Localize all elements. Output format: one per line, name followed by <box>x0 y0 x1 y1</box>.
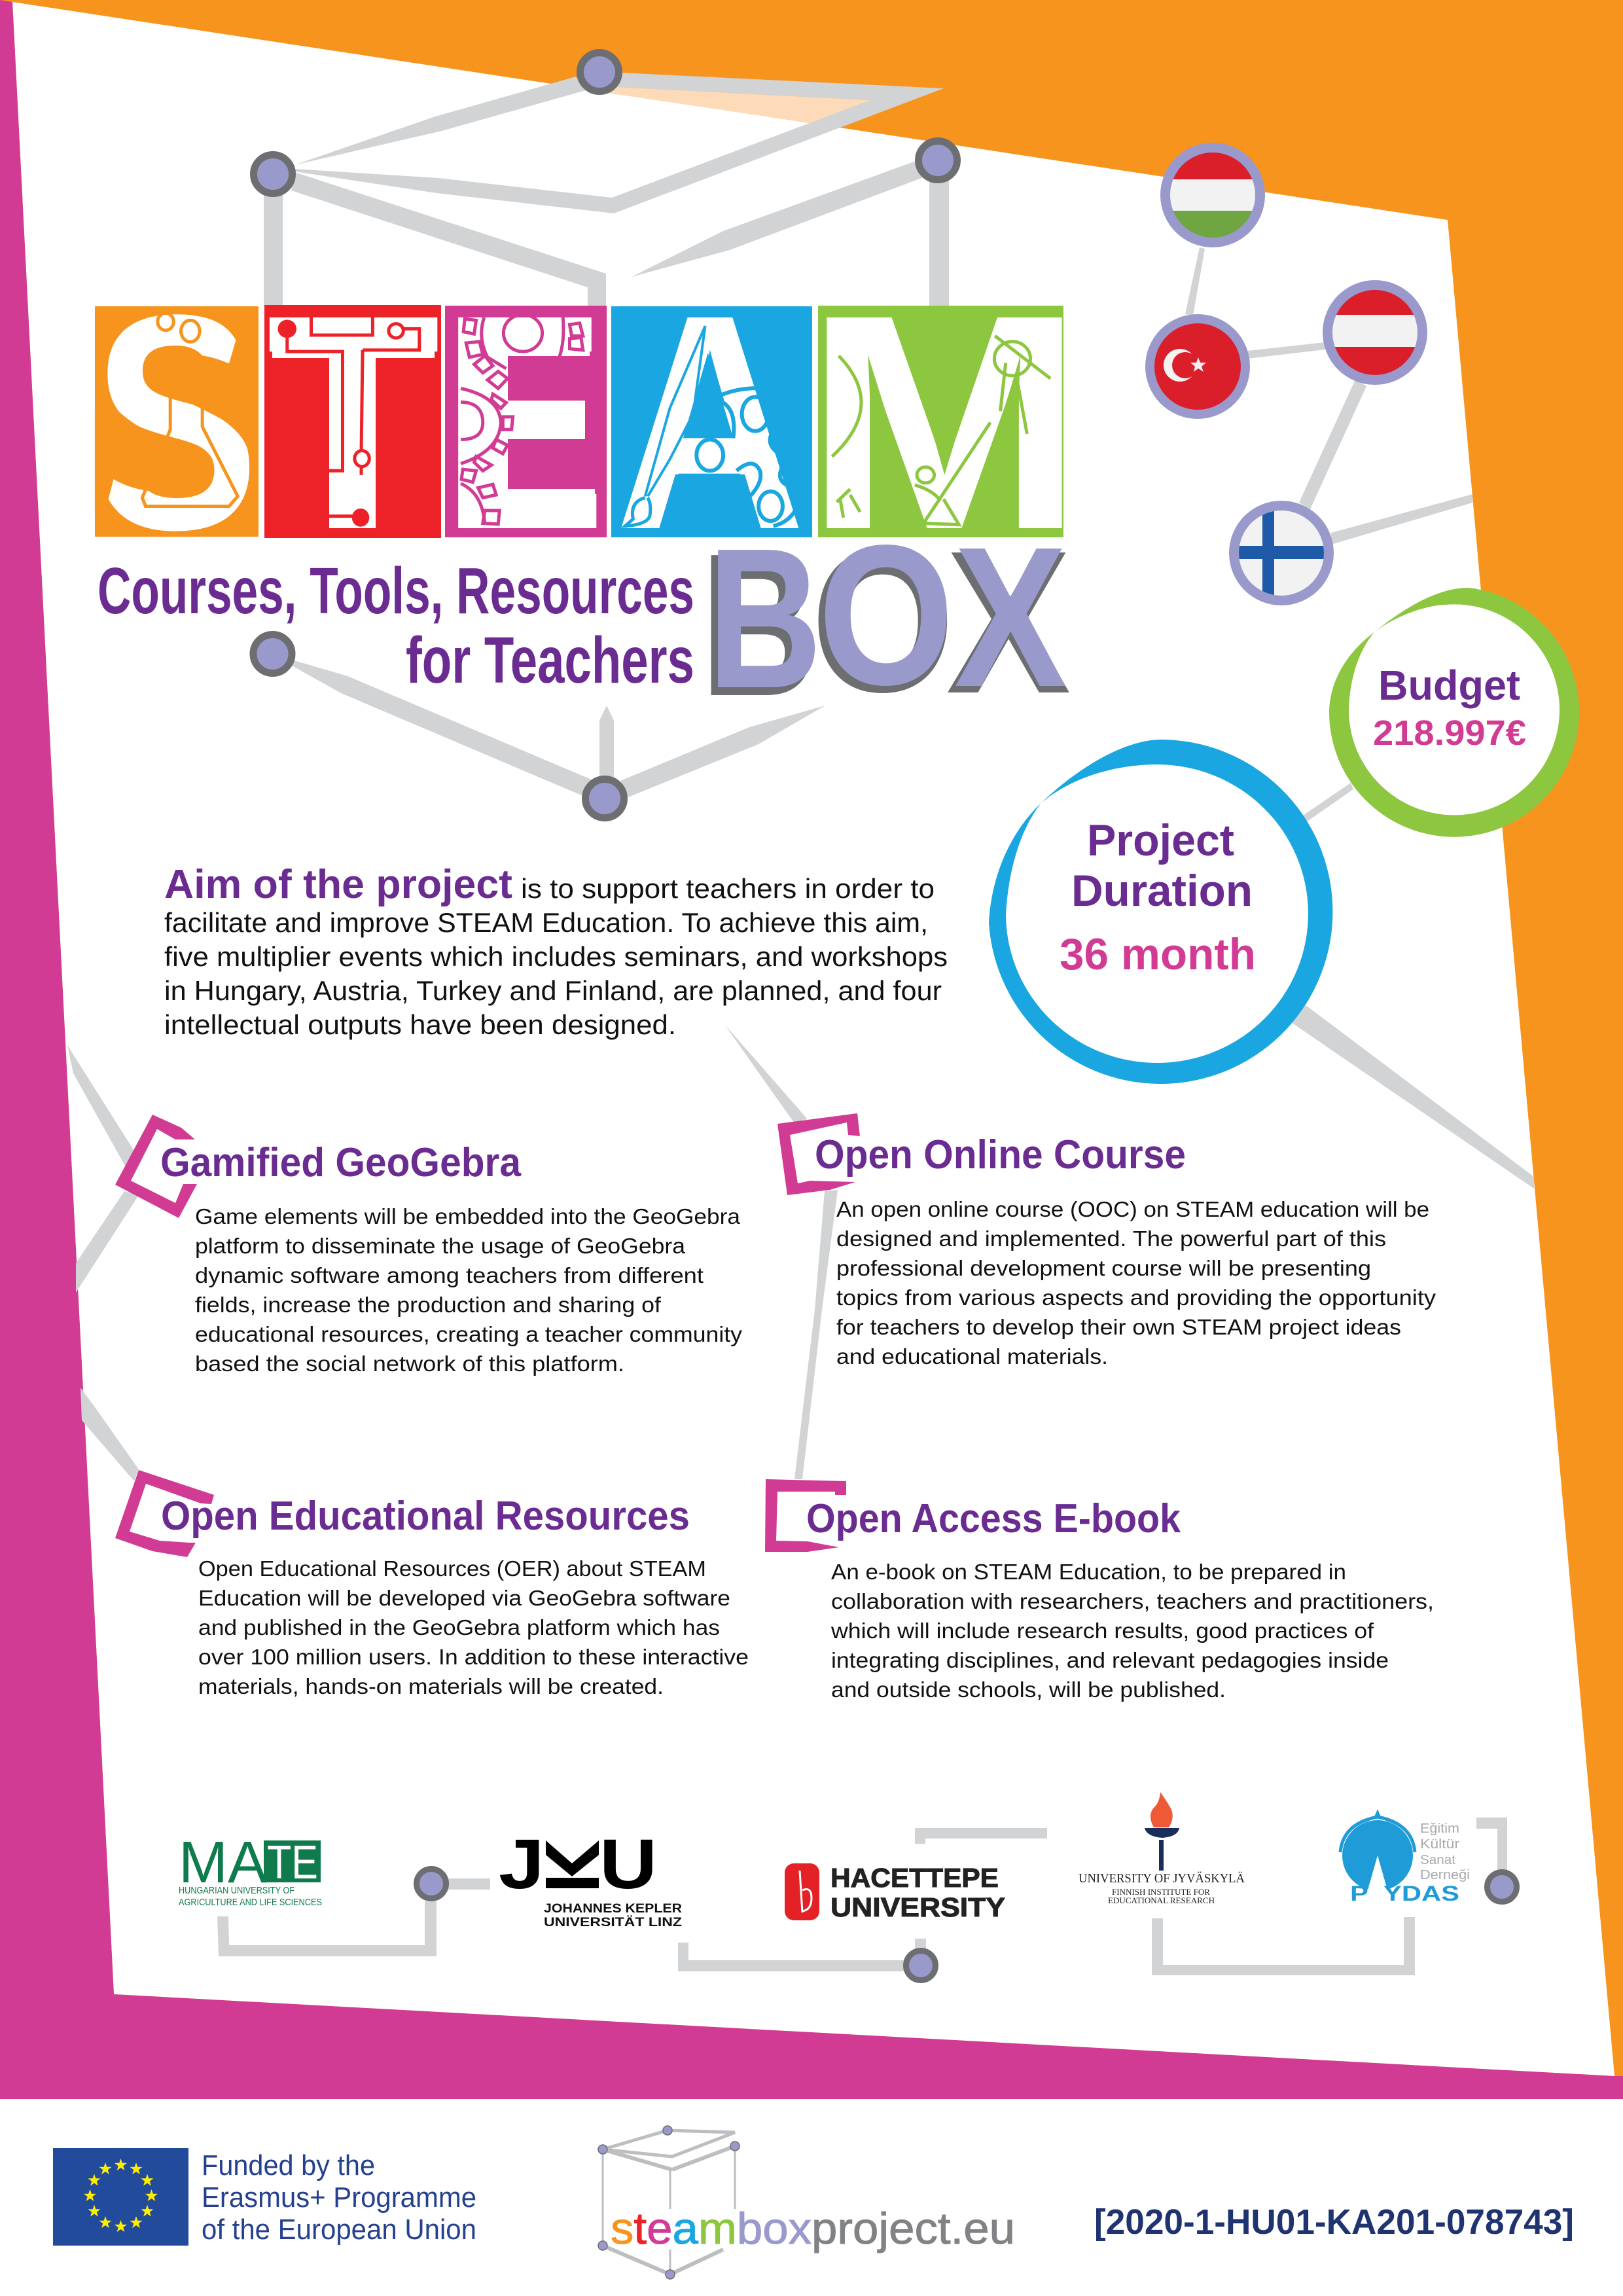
tagline: Courses, Tools, Resources for Teachers: for Teachers <box>406 624 694 697</box>
body text <box>830 1560 1434 1702</box>
body text <box>836 1197 1436 1369</box>
logo tile: A: A <box>615 251 806 594</box>
text block: aim of the project: five multiplier events which includes seminars, and workshops <box>164 941 948 972</box>
funding text: Funded by the <box>202 2149 375 2181</box>
callout: project duration: Project <box>1087 816 1234 865</box>
BOX wordmark: X <box>948 511 1069 734</box>
body text: dynamic software among teachers from different <box>195 1263 704 1287</box>
body text: materials, hands-on materials will be created. <box>198 1674 664 1698</box>
funding text <box>202 2149 476 2246</box>
body text: designed and implemented. The powerful part of this <box>836 1227 1386 1251</box>
tagline: Courses, Tools, Resources for Teachers: Courses, Tools, Resources <box>98 554 694 628</box>
callout: budget: Budget <box>1378 662 1520 709</box>
logo: Poydas: Kültür <box>1420 1837 1459 1852</box>
logo: Poydas <box>1340 1809 1470 1905</box>
text block: aim of the project: is to support teachers in order to <box>521 873 935 904</box>
cube graphic above and below the logo <box>253 52 957 818</box>
logo: JKU: J <box>499 1824 544 1903</box>
BOX wordmark: B <box>707 507 822 730</box>
BOX wordmark: X <box>954 505 1067 728</box>
body text: topics from various aspects and providing the opportunity <box>836 1285 1436 1310</box>
logo: University of Jyväskylä: FINNISH INSTITUTE FOR <box>1112 1887 1210 1897</box>
logo: JKU: U <box>599 1824 657 1903</box>
logo: Poydas: PAYDAS <box>1350 1882 1459 1905</box>
logo: Hacettepe University <box>785 1863 1005 1922</box>
callout: project duration: Duration <box>1071 866 1253 916</box>
footer: EU funding <box>53 2148 476 2246</box>
logo: Hacettepe University: UNIVERSITY <box>830 1892 1005 1922</box>
icon: EU flag <box>53 2148 188 2246</box>
icon: bracket <box>115 1470 214 1557</box>
logo: JKU: UNIVERSITÄT LINZ <box>544 1916 682 1929</box>
logo: Poydas: Derneği <box>1420 1868 1470 1882</box>
icon: bracket <box>777 1113 860 1195</box>
callout: budget: 218.997€ <box>1373 713 1526 753</box>
logo: University of Jyväskylä <box>1079 1792 1245 1905</box>
icon: small cube <box>598 2126 740 2279</box>
body text: An e-book on STEAM Education, to be prepared in <box>831 1560 1346 1584</box>
logo: Hacettepe University: HACETTEPE <box>830 1863 999 1893</box>
text block: aim of the project <box>164 862 948 1040</box>
callout: project duration: 36 month <box>1060 929 1256 979</box>
body text: educational resources, creating a teacher community <box>195 1322 743 1346</box>
footer: steamboxproject.eu logo <box>598 2126 1015 2279</box>
heading: Open Access E-book <box>806 1496 1181 1541</box>
logo: University of Jyväskylä: EDUCATIONAL RESEARCH <box>1108 1895 1215 1905</box>
logo: MATE: HUNGARIAN UNIVERSITY OF <box>179 1885 294 1896</box>
STEAM logo <box>92 251 1084 594</box>
panel: Open Access E-book <box>765 1479 1434 1702</box>
body text: and educational materials. <box>836 1344 1108 1369</box>
logo: MATE: TE <box>267 1837 318 1889</box>
funding text: Erasmus+ Programme <box>202 2181 476 2214</box>
body text <box>198 1556 749 1698</box>
body text: fields, increase the production and sharing of <box>195 1293 662 1317</box>
website text: steamboxproject.eu <box>611 2204 1015 2253</box>
body text: professional development course will be presenting <box>836 1256 1371 1280</box>
logo: Poydas: Sanat <box>1420 1853 1455 1867</box>
body text: An open online course (OOC) on STEAM education will be <box>836 1197 1429 1221</box>
flag: Hungary <box>1160 143 1265 247</box>
logo: MATE <box>179 1830 322 1908</box>
body text: based the social network of this platform. <box>195 1352 624 1376</box>
heading: Gamified GeoGebra <box>160 1140 521 1185</box>
callout: project duration <box>989 740 1332 1084</box>
body text: Game elements will be embedded into the GeoGebra <box>195 1204 741 1229</box>
text block: aim of the project: in Hungary, Austria, Turkey and Finland, are planned, and four <box>164 975 942 1006</box>
body text: and published in the GeoGebra platform which has <box>198 1615 720 1640</box>
connectors between flags <box>1185 247 1472 545</box>
footer: project code: [2020-1-HU01-KA201-078743] <box>1094 2202 1574 2242</box>
BOX wordmark: O <box>812 509 954 732</box>
logo: MATE: MA <box>179 1830 267 1895</box>
network lines: decorative connectors <box>67 783 1534 1481</box>
body text: platform to disseminate the usage of GeoGebra <box>195 1234 686 1258</box>
BOX wordmark: B <box>702 513 816 736</box>
panel: Open Educational Resources <box>115 1470 749 1698</box>
text block: aim of the project: facilitate and improve STEAM Education. To achieve this aim, <box>164 907 928 938</box>
icon: bracket <box>765 1479 846 1552</box>
partner logo connectors <box>217 1818 1517 1981</box>
funding text: of the European Union <box>202 2214 476 2246</box>
logo tile: T: T <box>266 251 440 594</box>
flag: Turkey <box>1145 314 1250 419</box>
icon: bracket <box>115 1115 197 1218</box>
text block: aim of the project: Aim of the project <box>164 862 512 907</box>
BOX wordmark: O <box>818 503 954 726</box>
body text: collaboration with researchers, teachers and practitioners, <box>831 1589 1434 1613</box>
panel: Gamified GeoGebra <box>115 1115 743 1376</box>
logo tile: M: M <box>804 251 1084 594</box>
logo: JKU: JOHANNES KEPLER <box>544 1902 682 1916</box>
body text <box>195 1204 743 1376</box>
body text: integrating disciplines, and relevant pedagogies inside <box>831 1648 1389 1672</box>
heading: Open Educational Resources <box>161 1494 690 1539</box>
logo: University of Jyväskylä: UNIVERSITY OF JYVÄSKYLÄ <box>1079 1871 1245 1886</box>
body text: Open Educational Resources (OER) about STEAM <box>198 1556 706 1581</box>
body text: Education will be developed via GeoGebra software <box>198 1586 730 1610</box>
logo: Poydas: Eğitim <box>1420 1821 1459 1836</box>
logo: JKU <box>499 1824 682 1929</box>
callout: budget <box>1329 588 1579 837</box>
logo tile: E: E <box>442 251 606 594</box>
body text: which will include research results, good practices of <box>830 1619 1374 1643</box>
panel: Open Online Course <box>777 1113 1436 1369</box>
logo: MATE: AGRICULTURE AND LIFE SCIENCES <box>179 1897 322 1908</box>
heading: Open Online Course <box>815 1132 1186 1177</box>
BOX wordmark <box>702 503 1069 736</box>
body text: over 100 million users. In addition to these interactive <box>198 1645 749 1669</box>
flag: Austria <box>1323 280 1427 385</box>
partner country flags network <box>1145 143 1472 605</box>
body text: for teachers to develop their own STEAM project ideas <box>836 1315 1401 1339</box>
logo tile: S: S <box>92 251 259 594</box>
tagline: Courses, Tools, Resources for Teachers <box>98 554 694 697</box>
body text: and outside schools, will be published. <box>831 1677 1226 1702</box>
text block: aim of the project: intellectual outputs have been designed. <box>164 1009 676 1040</box>
flag: Finland <box>1229 501 1334 605</box>
